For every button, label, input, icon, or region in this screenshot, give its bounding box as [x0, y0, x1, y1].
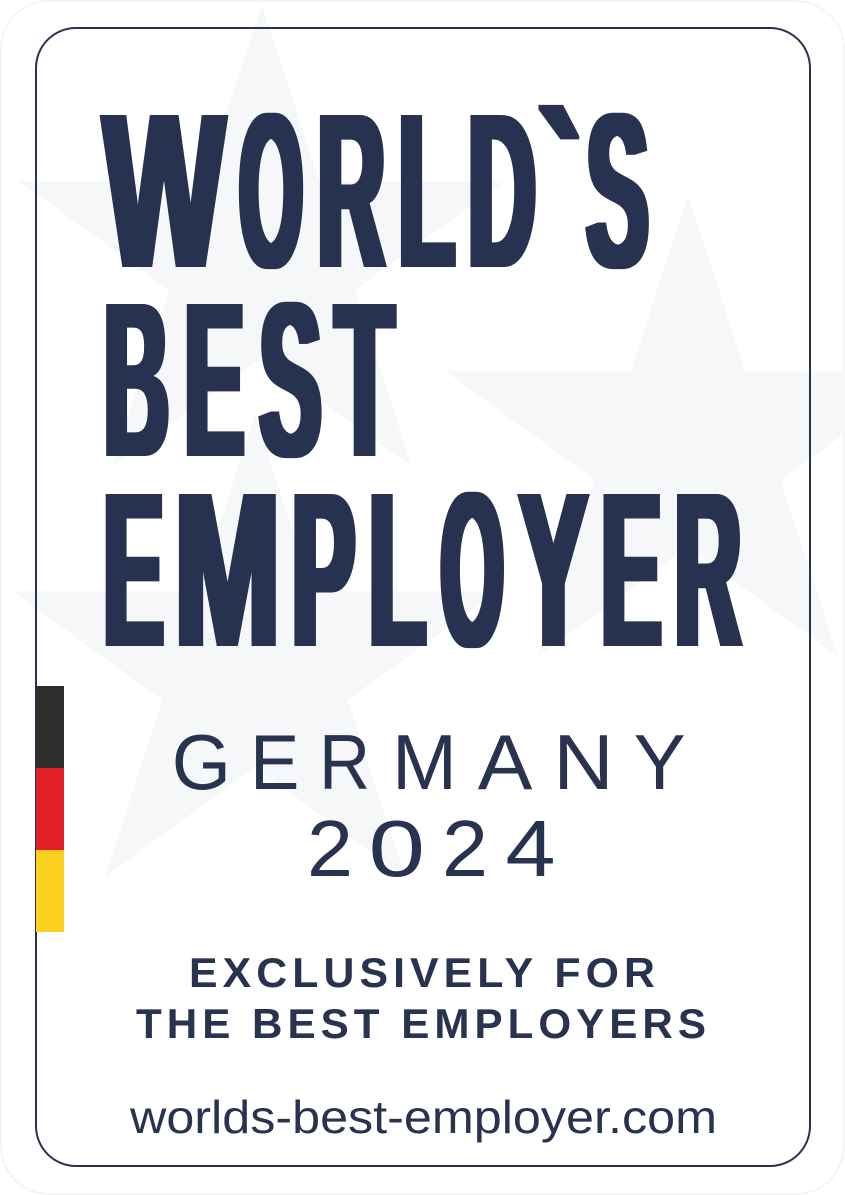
country: M	[392, 718, 457, 806]
title: E	[185, 256, 244, 503]
background stars	[12, 5, 845, 876]
title: Y	[519, 446, 588, 693]
year: 2	[442, 804, 488, 893]
country: R	[319, 718, 370, 806]
title: W	[103, 67, 225, 314]
tagline: THE BEST EMPLOYERS	[136, 1000, 711, 1047]
title: P	[292, 446, 355, 693]
year: 2	[307, 804, 353, 893]
flag stripe: Germany	[36, 686, 64, 932]
country: G	[172, 718, 231, 806]
badge: R	[675, 446, 741, 693]
title: L	[399, 67, 455, 314]
title: R	[318, 67, 385, 314]
title: O	[240, 67, 303, 314]
year: 0	[368, 804, 425, 893]
country: Y	[634, 718, 686, 806]
tagline	[136, 949, 711, 1047]
title: E	[602, 446, 661, 693]
website: worlds-best-employer.com	[129, 1091, 717, 1143]
title: M	[174, 446, 280, 693]
title: `	[538, 67, 582, 314]
title	[103, 67, 741, 693]
title: T	[335, 256, 394, 503]
title: S	[260, 256, 321, 503]
title: E	[104, 446, 163, 693]
title: O	[441, 446, 503, 693]
title: S	[586, 67, 648, 314]
title: L	[369, 446, 426, 693]
title: D	[468, 67, 536, 314]
year: 4	[506, 804, 556, 893]
country: A	[478, 718, 532, 806]
title: B	[104, 256, 169, 503]
tagline: EXCLUSIVELY FOR	[189, 949, 660, 996]
country: E	[250, 718, 299, 806]
country: N	[553, 718, 614, 806]
